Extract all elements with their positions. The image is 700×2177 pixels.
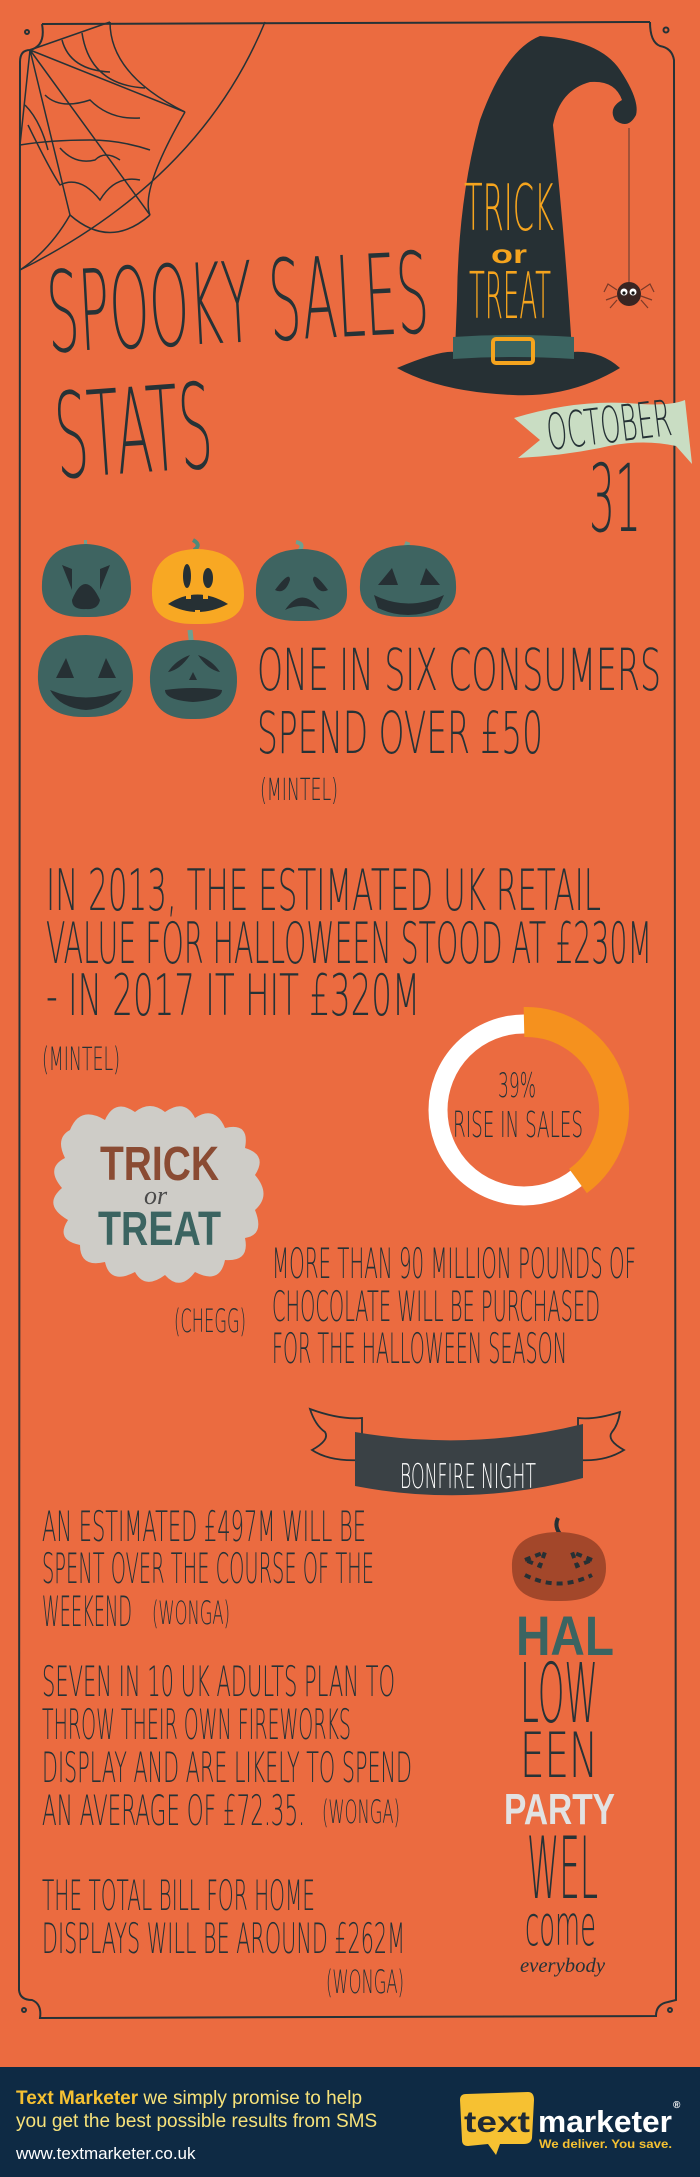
witch hat	[397, 36, 637, 395]
pumpkins group	[38, 540, 456, 719]
spider web	[20, 22, 265, 270]
pumpkin 2	[152, 540, 244, 624]
stat: chocolate	[174, 1239, 636, 1373]
footer	[0, 2067, 700, 2177]
title: STATS	[50, 357, 217, 506]
stat: retail value: - IN 2017 IT HIT £320M	[46, 963, 420, 1029]
trick or treat cloud	[53, 1106, 263, 1283]
donut chart: 39% rise	[438, 1022, 614, 1196]
pumpkin 4	[360, 542, 456, 617]
title	[44, 229, 432, 506]
icon: pumpkin	[512, 1518, 606, 1601]
footer text: you get the best possible results from SMS	[16, 2111, 377, 2132]
footer text: www.textmarketer.co.uk	[15, 2144, 196, 2163]
stat: fireworks: (WONGA)	[322, 1793, 400, 1831]
logo: text	[464, 2106, 530, 2139]
hat band	[453, 335, 574, 359]
stat: fireworks: AN AVERAGE OF £72.35.	[42, 1786, 305, 1835]
pumpkin 5	[38, 635, 133, 717]
witch hat: TRICK	[464, 172, 554, 246]
logo: We deliver. You save.	[539, 2137, 672, 2151]
logo: ®	[673, 2100, 681, 2111]
stat: total bill	[42, 1871, 405, 2001]
hat text	[464, 172, 554, 334]
stat: chocolate: (CHEGG)	[174, 1302, 246, 1340]
pumpkin 1	[42, 540, 131, 617]
stat: 497m: (WONGA)	[152, 1594, 230, 1632]
halloween party poster: PARTY	[504, 1785, 615, 1834]
october banner	[514, 389, 692, 464]
stat: 497m	[42, 1502, 374, 1636]
trick or treat cloud: TRICK	[100, 1138, 219, 1191]
pumpkin 3	[256, 542, 347, 621]
pumpkin 6	[150, 630, 237, 719]
halloween party poster: HAL	[516, 1604, 614, 1667]
trick or treat cloud: or	[144, 1181, 168, 1210]
bonfire night banner: BONFIRE NIGHT	[400, 1457, 536, 1497]
stat: retail value: (MINTEL)	[42, 1040, 120, 1078]
halloween party poster: come	[525, 1894, 596, 1959]
spider	[604, 128, 654, 308]
footer text	[15, 2088, 377, 2163]
buckle	[493, 339, 533, 363]
trick or treat cloud: TREAT	[98, 1203, 221, 1256]
stat: 497m: AN ESTIMATED £497M WILL BE	[42, 1502, 366, 1551]
halloween party poster: EEN	[520, 1719, 598, 1792]
stat: retail value	[42, 858, 652, 1078]
stat: one in six: (MINTEL)	[260, 773, 338, 808]
logo	[460, 2092, 681, 2155]
donut chart: 39% rise: 39%	[498, 1066, 536, 1106]
stat: total bill: (WONGA)	[326, 1963, 404, 2001]
stat: one in six	[257, 636, 661, 808]
witch hat: TREAT	[469, 260, 551, 334]
stat: total bill: THE TOTAL BILL FOR HOME	[42, 1871, 315, 1920]
halloween party poster	[504, 1518, 615, 1977]
logo: marketer	[538, 2104, 672, 2139]
halloween party poster: everybody	[520, 1955, 605, 1977]
stat: 497m: WEEKEND	[42, 1587, 132, 1636]
stat: fireworks	[42, 1657, 412, 1835]
footer text: Text Marketer we simply promise to help	[16, 2088, 362, 2109]
bonfire night banner	[310, 1409, 624, 1497]
hat text: or	[491, 239, 527, 269]
